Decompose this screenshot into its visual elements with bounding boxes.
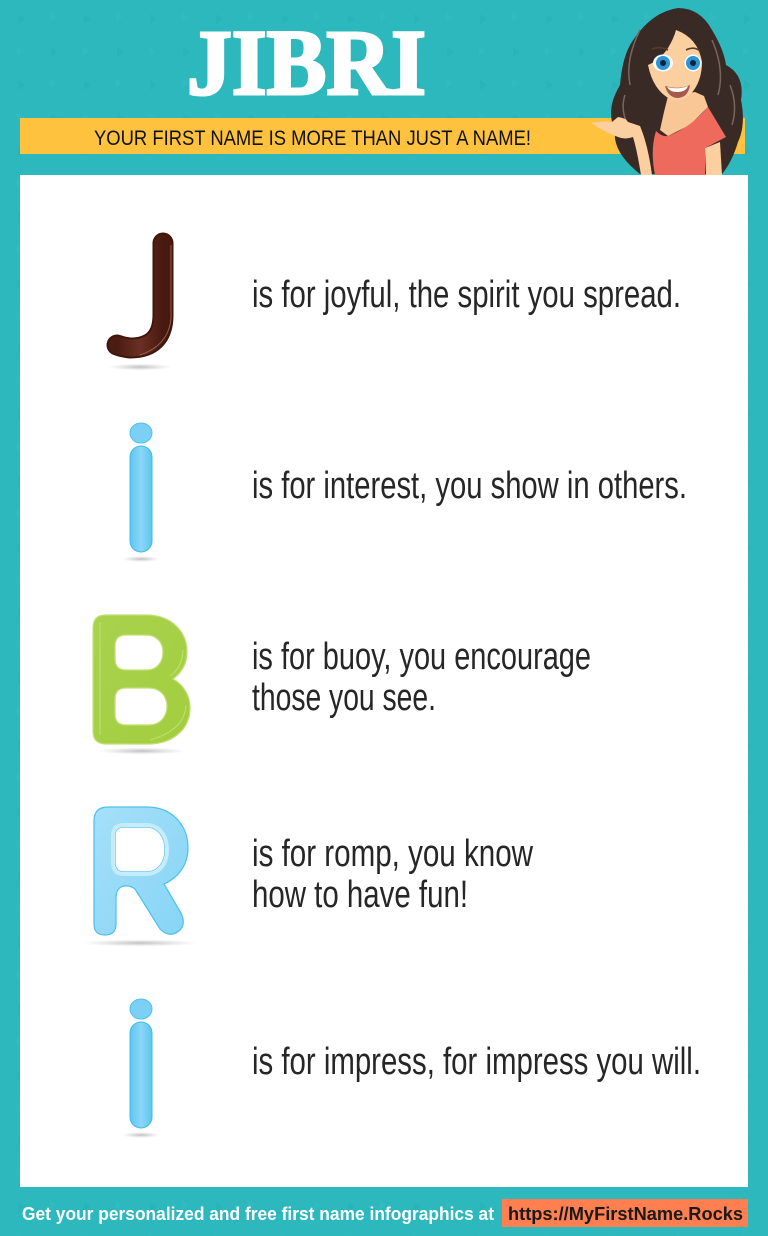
row 2: I xyxy=(122,423,687,562)
text: buoy: is for buoy, you encourage xyxy=(252,636,591,678)
character illustration: woman xyxy=(591,8,743,175)
row 4: R xyxy=(82,807,533,946)
row 3: B xyxy=(93,615,591,754)
text: romp: how to have fun! xyxy=(252,874,468,916)
row 1: J xyxy=(108,243,681,370)
text: romp xyxy=(252,833,533,916)
letter R xyxy=(82,807,198,946)
footer xyxy=(22,1199,748,1227)
URL badge: https://MyFirstName.Rocks xyxy=(508,1203,743,1224)
letter i xyxy=(122,423,160,562)
text: romp: is for romp, you know xyxy=(252,833,533,875)
title: JIBRI xyxy=(187,12,426,115)
subtitle text: YOUR FIRST NAME IS MORE THAN JUST A NAME! xyxy=(94,127,531,150)
white content panel xyxy=(20,175,748,1187)
text: buoy: those you see. xyxy=(252,677,436,719)
row 5: I xyxy=(122,999,701,1138)
text: buoy xyxy=(252,636,591,719)
letter J xyxy=(108,243,172,370)
letter B xyxy=(93,615,190,754)
footer text: Get your personalized and free first name infographics at xyxy=(22,1203,494,1224)
subtitle banner xyxy=(20,118,745,154)
letter i xyxy=(122,999,160,1138)
